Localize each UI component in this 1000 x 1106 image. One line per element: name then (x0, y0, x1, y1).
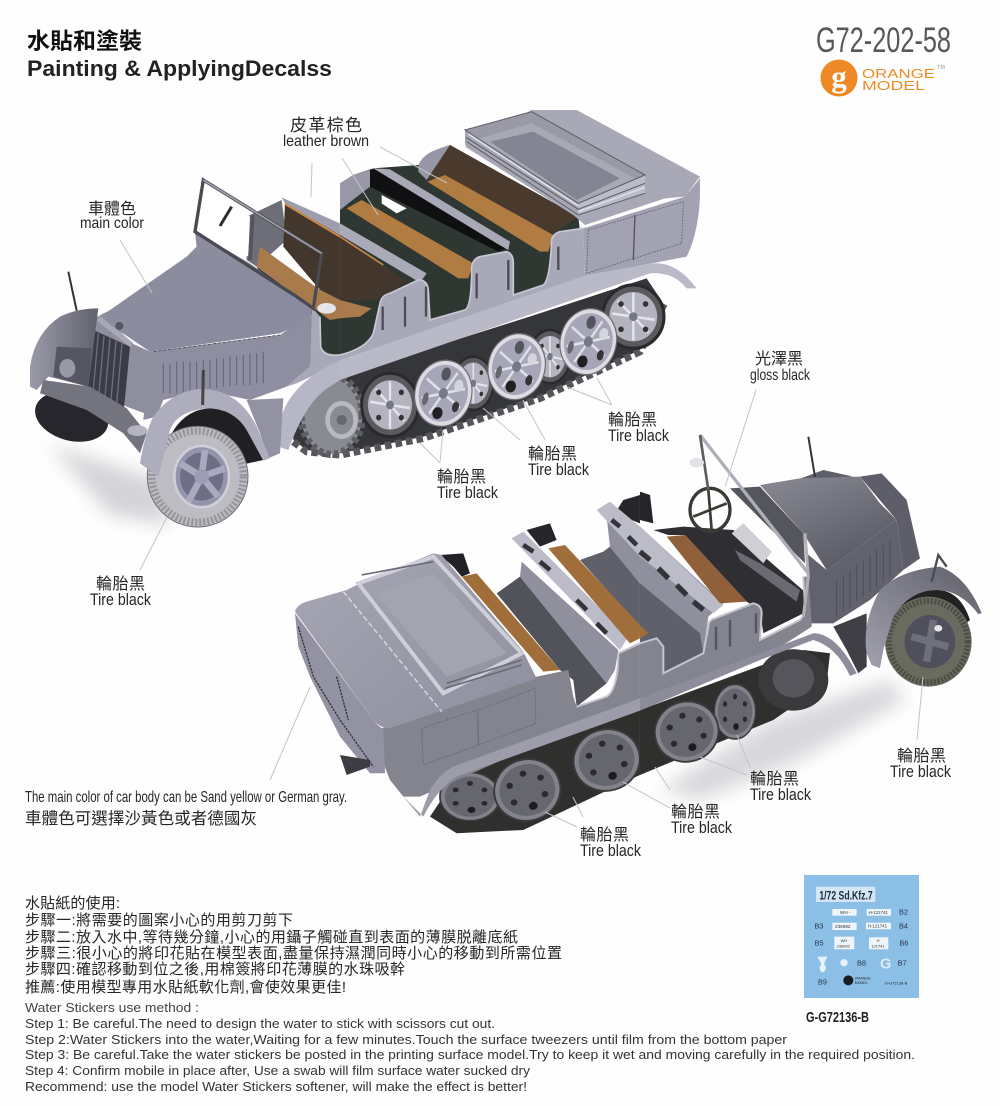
far front wheel (29, 384, 114, 449)
label: tire black, second vehicle track 3: Tire black (580, 842, 642, 860)
right headlight stub (127, 425, 147, 436)
label: gloss black (750, 350, 811, 384)
title: 水貼和塗裝 (27, 28, 142, 54)
label: main color (80, 200, 145, 232)
decal codes: B4 (899, 922, 908, 931)
front fender (866, 567, 982, 668)
label: tire black, second vehicle front tire: 輪胎黑 (897, 747, 946, 765)
fender marker post (198, 370, 208, 405)
front running board (640, 633, 857, 711)
label: tire black, rear wheel: 輪胎黑 (608, 411, 657, 429)
vehicle 1: front three-quarter view of halftrack (29, 110, 700, 527)
instructions in English: Step 2:Water Stickers into the water,Waiting for a few minutes.Touch the surface tweezers until film from the bottom paper (25, 1032, 788, 1047)
near-side rear fender (278, 360, 340, 450)
instructions in English: Water Stickers use method : (25, 1000, 199, 1015)
label: gloss black: gloss black (750, 367, 811, 384)
cab interior (247, 197, 340, 367)
front wheel (147, 426, 248, 527)
front fender with arch (140, 389, 270, 477)
orange model logo (820, 59, 945, 96)
rear stowage rack (343, 557, 522, 712)
label: tire black, forward wheel: 輪胎黑 (437, 468, 486, 486)
label: leather brown: 皮革棕色 (290, 116, 362, 135)
wheel (885, 590, 972, 687)
label: tire black, front tire (90, 575, 152, 609)
instructions in Chinese: 步驟四:確認移動到位之後,用棉簽將印花薄膜的水珠吸幹 (25, 960, 405, 978)
antenna (808, 437, 815, 477)
decal logo: G-G72136-B (885, 981, 908, 986)
orange model logo: ORANGE (862, 67, 935, 81)
label: gloss black: 光澤黑 (755, 350, 803, 368)
decal codes (814, 907, 908, 986)
decal number plates: WH - (840, 910, 851, 915)
rear fender band (403, 698, 640, 817)
decal codes: B3 (814, 922, 823, 931)
hull side with door cut-outs (340, 228, 585, 363)
hood (760, 477, 897, 570)
rear section hull side (382, 643, 640, 797)
decal number plates: H-121741 (869, 910, 888, 915)
instructions in Chinese: 步驟三:很小心的將印花貼在模型表面,盡量保持濕潤同時小心的移動到所需位置 (25, 945, 562, 962)
label: tire black, second vehicle track 1: 輪胎黑 (750, 770, 799, 788)
front section interior (640, 492, 807, 673)
running board and rear fender (340, 263, 697, 380)
label: tire black, second vehicle track 2 (671, 803, 733, 837)
label: main color: main color (80, 215, 145, 232)
decal number plates (832, 909, 891, 949)
decal sheet title: 1/72 Sd.Kfz.7 (819, 888, 873, 902)
note: main color options: The main color of car body can be Sand yellow or German gray. (25, 789, 347, 806)
decal codes: B5 (815, 938, 824, 947)
label: tire black, middle wheel (528, 445, 590, 479)
decal number plates: 121741 (871, 943, 885, 948)
instructions in Chinese: 推薦:使用模型專用水貼紙軟化劑,會使效果更佳! (25, 979, 346, 996)
instructions in Chinese: 步驟二:放入水中,等待幾分鐘,小心的用鑷子觸碰直到表面的薄膜脱離底紙 (25, 928, 518, 946)
decal number plates: 236992 (837, 943, 851, 948)
label: tire black, forward wheel: Tire black (437, 484, 499, 502)
bumper (40, 380, 147, 453)
left front fender and headlamp (30, 308, 98, 390)
decal number plates: WH (841, 938, 847, 943)
label: tire black, front tire: Tire black (90, 591, 152, 609)
windscreen frame (195, 180, 336, 314)
fender post (932, 555, 947, 582)
label: tire black, second vehicle front tire: Tire black (890, 763, 952, 781)
decal codes: B7 (898, 958, 907, 967)
label: tire black, second vehicle track 1 (750, 770, 812, 804)
engine side with louvres (143, 313, 312, 420)
grille (88, 313, 158, 417)
orange model logo: TM (937, 65, 945, 71)
label: tire black, second vehicle track 1: Tire black (750, 786, 812, 804)
instructions in English: Step 3: Be careful.Take the water stickers be posted in the printing surface model.Try to keep it wet and moving carefully in the required position. (25, 1047, 915, 1062)
track (293, 278, 664, 455)
rear section interior, cushions and bulkheads (440, 495, 640, 707)
vehicle 2: rear three-quarter view of halftrack (295, 435, 982, 833)
label: tire black, second vehicle front tire (890, 747, 952, 781)
track and wheels, rear section (430, 710, 647, 833)
instructions in English: Step 1: Be careful.The need to design the water to stick with scissors cut out. (25, 1016, 495, 1031)
drive sprocket (301, 376, 362, 454)
rear face plate (295, 613, 385, 775)
decal codes: B2 (899, 907, 908, 916)
decal number plates: H-121741 (868, 924, 888, 929)
rear stowage deck, side plate and luggage rack (465, 110, 700, 277)
step board (247, 398, 283, 458)
label: tire black, second vehicle track 2: Tire black (671, 819, 733, 837)
step (833, 613, 867, 673)
decal logo: ORANGE (855, 976, 871, 980)
note: main color options: 車體色可選擇沙黃色或者德國灰 (25, 809, 257, 828)
label: tire black, second vehicle track 3: 輪胎黑 (580, 826, 629, 844)
ground shadow (50, 445, 170, 525)
instructions in Chinese (25, 895, 562, 996)
steering wheel (690, 488, 730, 532)
front section hull side and door frame (640, 577, 812, 698)
note: main color options (25, 789, 347, 828)
ground shadow (660, 680, 905, 800)
orange model logo: MODEL (862, 79, 925, 93)
title: Painting & ApplyingDecalss (27, 56, 332, 81)
instructions in Chinese: 步驟一:將需要的圖案小心的用剪刀剪下 (25, 912, 293, 929)
instructions in English: Recommend: use the model Water Stickers softener, will make the effect is better! (25, 1079, 527, 1094)
road wheels (362, 285, 664, 437)
decal sheet (804, 875, 919, 998)
leader lines (120, 147, 923, 827)
wheel arch shadow (163, 408, 263, 467)
decal codes: B6 (899, 938, 908, 947)
track and wheels, front section (640, 649, 830, 775)
instructions in English (25, 1000, 915, 1094)
orange model logo: g (831, 59, 847, 94)
decal sheet code: G-G72136-B (806, 1009, 869, 1026)
hull side behind cab (287, 307, 340, 387)
radiator nose (860, 473, 920, 570)
label: tire black, front tire: 輪胎黑 (96, 575, 145, 593)
cowl hump behind hood (797, 470, 853, 480)
label: tire black, second vehicle track 2: 輪胎黑 (671, 803, 720, 821)
windscreen (689, 435, 808, 617)
label: tire black, rear wheel: Tire black (608, 427, 670, 445)
instructions in Chinese: 水貼紙的使用: (25, 895, 120, 912)
instructions in English: Step 4: Confirm mobile in place after, Use a swab will film surface water sucked dry (25, 1063, 531, 1078)
rear deck (295, 553, 537, 728)
open compartment seats and bulkheads (340, 145, 585, 363)
label: tire black, rear wheel (608, 411, 670, 445)
engine side (807, 520, 903, 623)
label: tire black, second vehicle track 3 (580, 826, 642, 860)
decal codes: B8 (857, 958, 866, 967)
decal number plates: H (877, 938, 880, 943)
decal number plates: 236992 (835, 924, 851, 929)
label: leather brown: leather brown (283, 133, 369, 150)
decal logo (843, 975, 908, 986)
title (27, 28, 332, 81)
cowl and hood (98, 232, 312, 352)
product code: G72-202-58 (816, 21, 951, 60)
label: tire black, middle wheel: 輪胎黑 (528, 445, 577, 463)
label: tire black, middle wheel: Tire black (528, 461, 590, 479)
decal emblems: G (880, 957, 891, 973)
label: leather brown (283, 116, 369, 150)
decal logo: MODEL (855, 981, 868, 985)
label: main color: 車體色 (88, 200, 136, 218)
decal codes: B9 (818, 977, 827, 986)
radio antenna (68, 272, 77, 311)
label: tire black, forward wheel (437, 468, 499, 502)
